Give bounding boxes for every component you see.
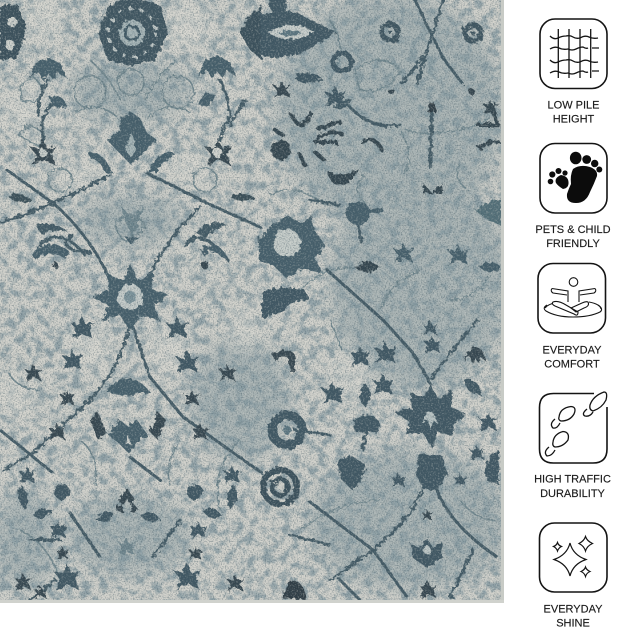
- icon: everyday shine: [540, 523, 607, 592]
- icon: everyday comfort: [538, 264, 606, 333]
- label: everyday shine: SHINE: [556, 618, 590, 630]
- label: pets and child friendly: FRIENDLY: [546, 238, 600, 250]
- icon: low pile height: [540, 19, 607, 88]
- label: everyday shine: EVERYDAY: [544, 604, 602, 616]
- icon: pets and child friendly: [540, 144, 607, 213]
- label: low pile height: LOW PILE: [548, 100, 599, 112]
- label: high traffic durability: HIGH TRAFFIC: [534, 474, 611, 486]
- panel: rug photograph: [0, 0, 510, 603]
- label: pets and child friendly: PETS & CHILD: [535, 224, 611, 236]
- label: low pile height: HEIGHT: [553, 114, 595, 126]
- label: high traffic durability: DURABILITY: [540, 488, 606, 500]
- icon: high traffic durability: [540, 392, 607, 463]
- label: everyday comfort: COMFORT: [544, 358, 600, 370]
- label: everyday comfort: EVERYDAY: [543, 344, 601, 356]
